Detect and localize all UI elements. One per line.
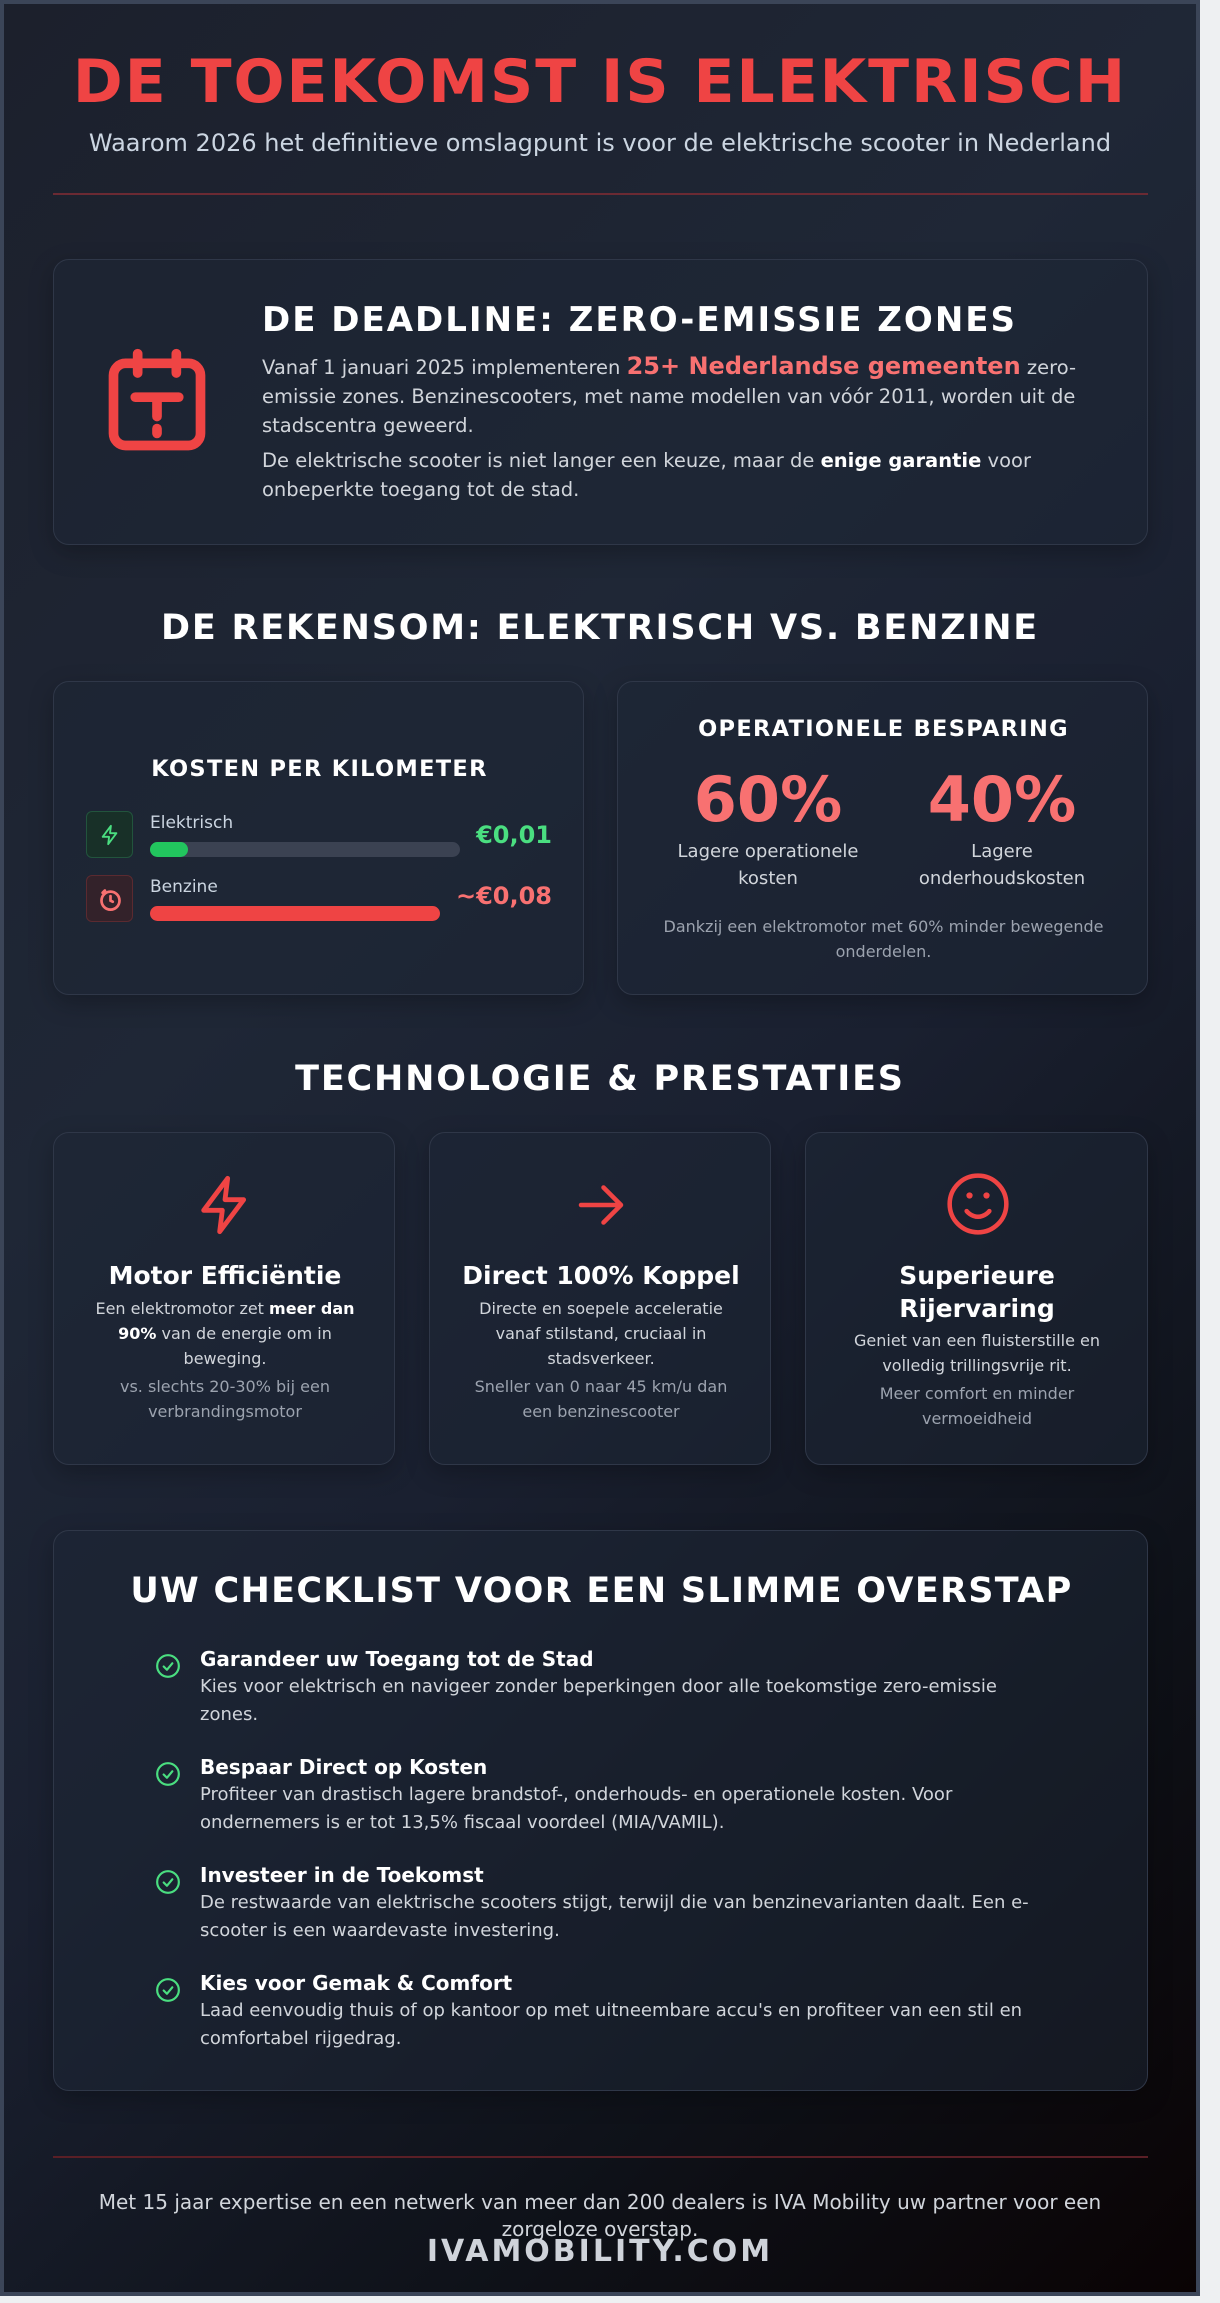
item 4: Kies voor Gemak & Comfort bbox=[200, 1971, 512, 1995]
panel: operationele besparing bbox=[617, 681, 1148, 995]
panel: deadline bbox=[53, 259, 1148, 545]
stat: 60%: Lagere operationele bbox=[678, 841, 858, 862]
card: rijervaring: Rijervaring bbox=[899, 1294, 1055, 1323]
footer text: Met 15 jaar expertise en een netwerk van meer dan 200 dealers is IVA Mobility uw partner voor een zorgeloze overstap. bbox=[99, 2190, 1101, 2241]
item 3: Investeer in de Toekomst bbox=[200, 1863, 484, 1887]
item 2: Bespaar Direct op Kosten bbox=[200, 1755, 487, 1779]
row: elektrisch bbox=[86, 811, 552, 858]
row: benzine bbox=[86, 875, 552, 922]
item 4: Laad eenvoudig thuis of op kantoor op met uitneembare accu's en profiteer van een stil en comfortabel rijgedrag. bbox=[200, 2000, 1022, 2049]
icon: fuel gauge bbox=[86, 875, 133, 922]
footer brand: IVAMOBILITY.COM bbox=[427, 2234, 773, 2269]
deadline text bbox=[262, 352, 1076, 501]
stat: 40%: 40% bbox=[928, 763, 1076, 836]
card: rijervaring: Meer comfort en minder vermoeidheid bbox=[880, 1384, 1074, 1428]
item 3: De restwaarde van elektrische scooters stijgt, terwijl die van benzinevarianten daalt. Een e-scooter is een waardevaste investering. bbox=[200, 1892, 1029, 1941]
item 1: Garandeer uw Toegang tot de Stad bbox=[200, 1647, 594, 1671]
besparing heading: OPERATIONELE BESPARING bbox=[698, 716, 1069, 742]
item 2 bbox=[156, 1755, 952, 1833]
card: motor efficientie: Motor Efficiëntie bbox=[109, 1261, 341, 1290]
stat: 40% bbox=[919, 763, 1085, 889]
checklist heading: UW CHECKLIST VOOR EEN SLIMME OVERSTAP bbox=[130, 1571, 1073, 1611]
row: benzine: ~€0,08 bbox=[456, 882, 552, 910]
stat: 60% bbox=[678, 763, 858, 889]
card: motor efficientie: vs. slechts 20-30% bij een verbrandingsmotor bbox=[120, 1377, 330, 1421]
title: DE TOEKOMST IS ELEKTRISCH bbox=[73, 47, 1127, 117]
deadline heading: DE DEADLINE: ZERO-EMISSIE ZONES bbox=[262, 300, 1017, 340]
card: koppel: Direct 100% Koppel bbox=[462, 1261, 740, 1290]
stat: 40%: onderhoudskosten bbox=[919, 868, 1085, 889]
icon: bolt bbox=[86, 811, 133, 858]
panel: kosten per kilometer bbox=[53, 681, 584, 995]
icon: calendar bbox=[108, 348, 206, 450]
row: benzine: Benzine bbox=[150, 877, 218, 897]
stat: 60%: kosten bbox=[738, 868, 798, 889]
card: koppel bbox=[429, 1132, 771, 1465]
icon: bolt bbox=[201, 1176, 246, 1234]
subtitle: Waarom 2026 het definitieve omslagpunt is voor de elektrische scooter in Nederland bbox=[89, 129, 1111, 157]
item 4 bbox=[156, 1971, 1022, 2049]
kosten heading: KOSTEN PER KILOMETER bbox=[151, 756, 488, 782]
heading: technologie: TECHNOLOGIE & PRESTATIES bbox=[295, 1059, 905, 1099]
card: motor efficientie bbox=[53, 1132, 395, 1465]
card: koppel: Sneller van 0 naar 45 km/u dan een benzinescooter bbox=[475, 1377, 727, 1421]
deadline text: De elektrische scooter is niet langer een keuze, maar de enige garantie voor onbeperkte toegang tot de stad. bbox=[262, 449, 1031, 501]
heading: rekensom: DE REKENSOM: ELEKTRISCH VS. BENZINE bbox=[161, 608, 1039, 648]
card: rijervaring: Superieure bbox=[899, 1261, 1055, 1290]
stat: 40%: Lagere bbox=[971, 841, 1033, 862]
deadline text: Vanaf 1 januari 2025 implementeren 25+ Nederlandse gemeenten zero-emissie zones. Benzinescooters, met name modellen van vóór 2011, worden uit de stadscentra geweerd. bbox=[262, 352, 1076, 437]
item 2: Profiteer van drastisch lagere brandstof-, onderhouds- en operationele kosten. Voor ondernemers is er tot 13,5% fiscaal voordeel (MIA/VAMIL). bbox=[200, 1784, 952, 1833]
card: rijervaring bbox=[805, 1132, 1148, 1465]
stat: 60%: 60% bbox=[694, 763, 842, 836]
item 1: Kies voor elektrisch en navigeer zonder beperkingen door alle toekomstige zero-emissie zones. bbox=[200, 1676, 997, 1725]
icon: arrow bbox=[578, 1185, 624, 1225]
card: rijervaring: Geniet van een fluisterstille en volledig trillingsvrije rit. bbox=[854, 1331, 1100, 1375]
card: motor efficientie: Een elektromotor zet meer dan 90% van de energie om in beweging. bbox=[95, 1299, 355, 1368]
card: koppel: Directe en soepele acceleratie vanaf stilstand, cruciaal in stadsverkeer. bbox=[479, 1299, 723, 1368]
item 3 bbox=[156, 1863, 1029, 1941]
icon: smiley bbox=[947, 1173, 1009, 1235]
panel: checklist bbox=[53, 1530, 1148, 2091]
row: elektrisch: €0,01 bbox=[476, 821, 552, 849]
row: elektrisch: Elektrisch bbox=[150, 813, 233, 833]
item 1 bbox=[156, 1647, 997, 1725]
footnote: Dankzij een elektromotor met 60% minder bewegende onderdelen. bbox=[664, 917, 1103, 961]
